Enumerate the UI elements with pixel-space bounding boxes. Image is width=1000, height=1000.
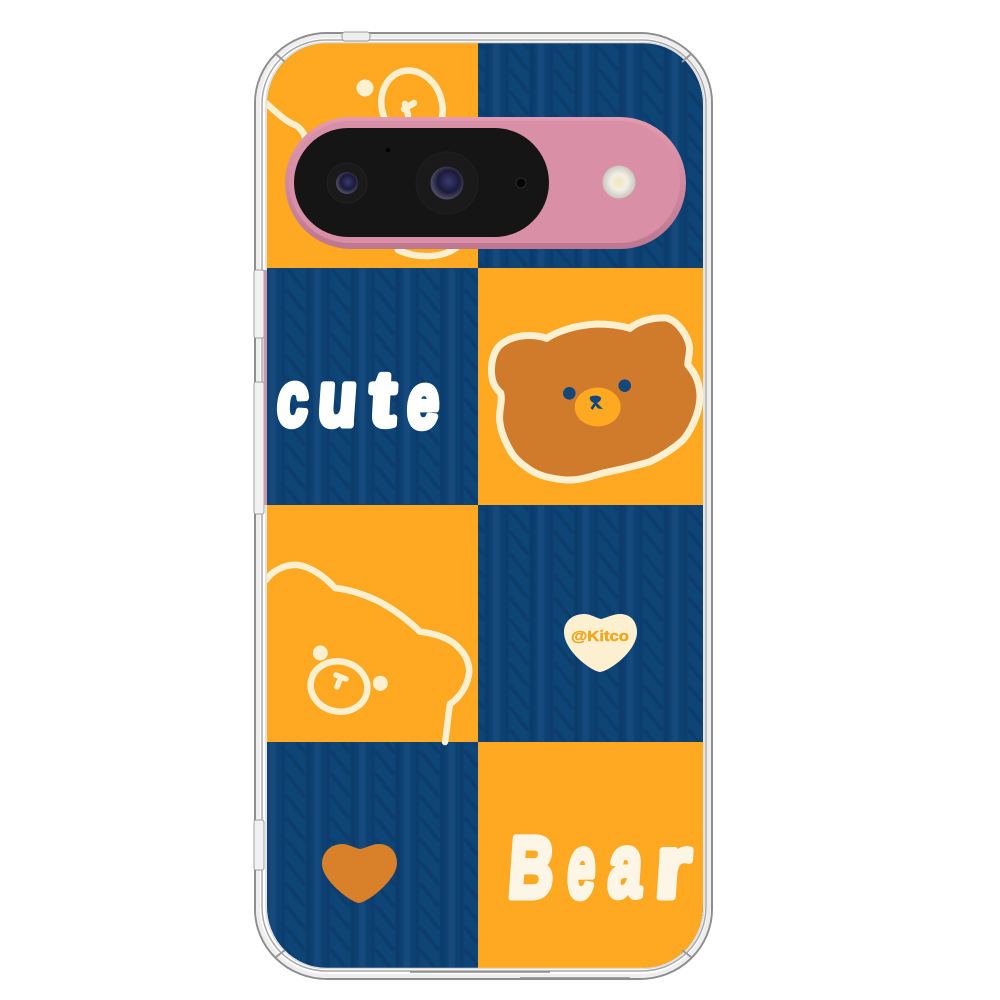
sensor	[516, 178, 526, 188]
camera bar face	[289, 121, 680, 243]
icon: cream heart with label	[564, 614, 637, 672]
square: navy knit with brown heart	[267, 742, 478, 968]
text: cute: u	[316, 356, 360, 441]
text: Bear: r	[653, 817, 694, 916]
text: cute: c	[275, 357, 311, 442]
small lens	[327, 163, 367, 203]
square: orange with bear text	[478, 742, 703, 968]
icon: brown heart	[322, 844, 397, 903]
corner bumpers	[276, 54, 691, 957]
text: cute: e	[405, 359, 442, 444]
square: orange with outline bear	[267, 505, 478, 742]
text: Bear: B	[506, 819, 557, 915]
text: Bear: e	[565, 818, 599, 917]
case top notch	[342, 32, 370, 41]
navy base under knit squares	[267, 43, 703, 968]
text: cute	[276, 372, 440, 432]
bear muzzle	[575, 388, 621, 426]
microphone dot	[386, 148, 390, 152]
black camera window	[294, 128, 549, 237]
text: Bear: a	[606, 817, 647, 915]
square: orange top left	[267, 43, 478, 268]
icon: brown bear face sticker	[491, 318, 700, 480]
case side buttons, left	[254, 270, 264, 870]
phone case product image	[254, 32, 713, 980]
case bottom port	[410, 972, 630, 978]
back panel: checkerboard of orange and navy squares	[266, 43, 703, 968]
bear right eye	[618, 379, 631, 392]
label: @Kitco: @Kitco	[571, 628, 629, 645]
text: Bear	[508, 834, 694, 902]
clear protective case outline	[254, 32, 712, 979]
bear nose	[590, 396, 603, 410]
square: orange with brown bear	[478, 268, 703, 505]
icon: cropped outline bear, top left	[266, 62, 456, 256]
square: navy knit top right	[478, 43, 703, 268]
square: navy knit with label heart	[478, 505, 703, 742]
main lens	[416, 152, 478, 214]
bear left eye	[563, 387, 576, 400]
flash	[602, 166, 636, 198]
pink inner edge, left	[264, 270, 267, 505]
icon: outline bear, lower left	[266, 565, 469, 742]
text: cute: t	[368, 357, 398, 442]
square: navy knit with cute	[267, 268, 478, 505]
camera bar rim	[285, 117, 686, 249]
camera bar	[285, 117, 686, 249]
